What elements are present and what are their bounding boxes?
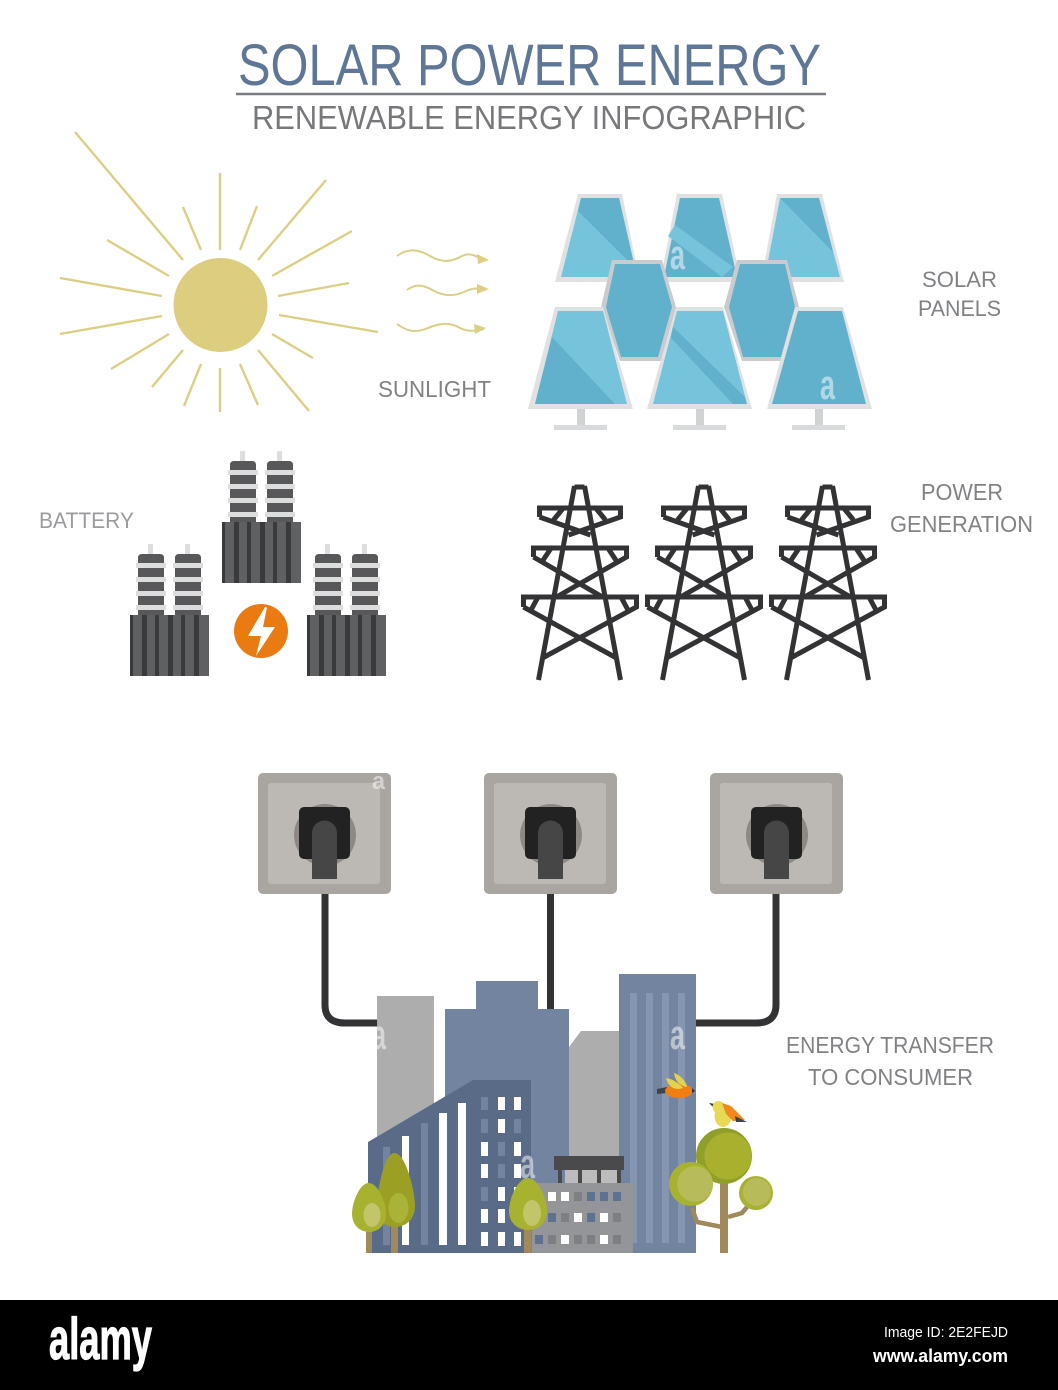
icon: battery right <box>307 544 386 676</box>
building: grey centre <box>569 1031 620 1190</box>
icon: lightning bolt badge <box>234 604 288 658</box>
city <box>352 974 773 1253</box>
watermark letters: a <box>372 768 386 795</box>
socket right <box>710 773 843 894</box>
socket centre <box>484 773 617 894</box>
panel: back left <box>555 194 640 282</box>
subtitle: RENEWABLE ENERGY INFOGRAPHIC <box>252 100 806 137</box>
watermark letters: a <box>820 361 835 408</box>
panel: back centre <box>660 194 741 282</box>
watermark letters <box>372 231 835 1187</box>
logo: alamy: alamy <box>49 1307 152 1372</box>
watermark letters: a <box>372 1011 386 1058</box>
panel: front left <box>528 307 633 430</box>
icon: pylon 3 <box>772 486 884 680</box>
building: right tower <box>619 974 696 1253</box>
panel: hexagon right <box>724 260 799 361</box>
panel: front right <box>767 307 872 430</box>
footer bar <box>0 1300 1058 1390</box>
tree: small centre <box>509 1178 547 1253</box>
power cables <box>325 879 776 1023</box>
icon: battery left <box>130 544 209 676</box>
watermark letters: a <box>670 231 685 278</box>
solar panels <box>528 194 872 430</box>
panel: hexagon left <box>601 260 676 361</box>
tree: small left <box>352 1183 386 1253</box>
watermark letters: a <box>670 1011 685 1058</box>
bird: flying orange <box>657 1073 695 1098</box>
icon: pylon 1 <box>524 486 636 680</box>
label: battery: BATTERY <box>39 508 134 533</box>
image id: Image ID: 2E2FEJD <box>884 1324 1008 1341</box>
label: power generation: POWER <box>921 479 1003 505</box>
label: energy transfer: ENERGY TRANSFER <box>786 1032 994 1058</box>
building: grey left tower <box>377 996 434 1166</box>
label: solar panels: SOLAR <box>922 267 997 292</box>
label: sunlight: SUNLIGHT <box>378 376 491 402</box>
title: SOLAR POWER ENERGY <box>238 33 821 98</box>
watermark letters: a <box>520 1140 535 1187</box>
panel: back right <box>761 194 844 282</box>
building: low grey <box>532 1156 633 1253</box>
building: front dark blue <box>368 1080 531 1253</box>
label: power generation: GENERATION <box>890 511 1033 537</box>
icon: battery top <box>222 451 301 583</box>
bird: perched yellow <box>709 1101 747 1127</box>
socket left <box>258 773 391 894</box>
building: blue main <box>445 981 569 1253</box>
arrows: sunlight waves <box>397 250 489 334</box>
panel: front centre <box>647 307 752 430</box>
icon: pylon 2 <box>648 486 760 680</box>
tree: round tree right <box>669 1128 773 1253</box>
icon: sun <box>60 132 378 412</box>
website: www.alamy.com <box>872 1346 1008 1366</box>
label: energy transfer: TO CONSUMER <box>808 1064 973 1090</box>
pylons <box>524 486 884 680</box>
label: solar panels: PANELS <box>918 296 1001 321</box>
batteries <box>130 451 386 676</box>
tree: tall back <box>377 1153 415 1253</box>
